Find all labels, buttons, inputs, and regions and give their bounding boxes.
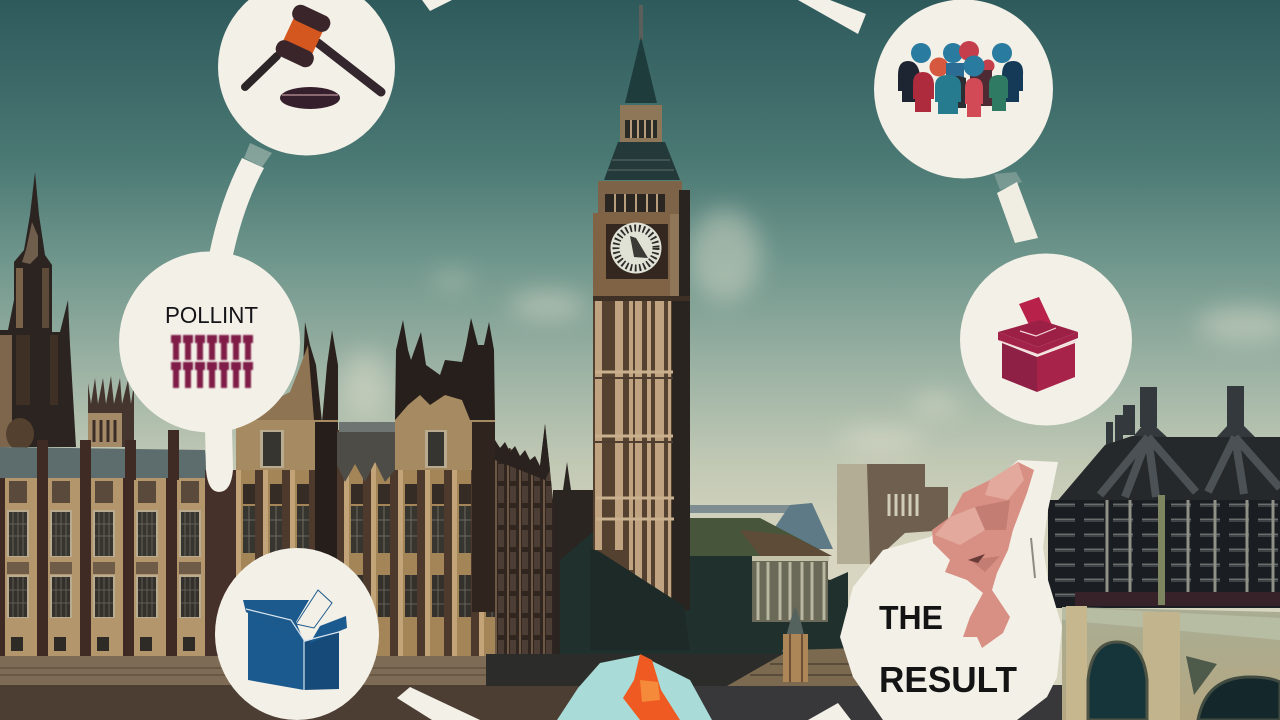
- lower dark block: [553, 462, 595, 656]
- connector: arcs between steps: [209, 0, 1038, 720]
- top-left arc piece: [422, 0, 452, 11]
- roof: [1048, 436, 1280, 512]
- faded link below gavel: [244, 143, 272, 167]
- chimneys: [1106, 386, 1256, 452]
- tan block: [837, 464, 948, 565]
- belfry: [620, 105, 662, 142]
- top-right arc piece: [798, 0, 866, 34]
- heading: the result label: [879, 599, 1017, 700]
- clock stage: [593, 213, 681, 298]
- icon: group of people: [898, 41, 1023, 117]
- faded link below people: [994, 172, 1022, 190]
- Westminster Bridge: [1062, 606, 1280, 720]
- icon: red ballot box: [998, 297, 1078, 392]
- left clock tower spire: [0, 172, 76, 450]
- central link block: [337, 422, 397, 656]
- slate roof: [0, 447, 208, 480]
- spire: [625, 37, 657, 103]
- railing: [1075, 592, 1280, 606]
- step: ballot box red: [960, 254, 1132, 426]
- heading: the result label: THE: [879, 599, 943, 636]
- trees behind colonnade: [560, 530, 848, 656]
- icon: orange figure: [623, 654, 680, 720]
- roof ribs: [1100, 437, 1280, 497]
- step: people: [874, 0, 1053, 178]
- facade: [1048, 500, 1280, 608]
- east wing: [495, 424, 553, 656]
- icon: blue ballot box: [243, 590, 347, 690]
- lantern: [598, 181, 682, 214]
- piers: [1066, 606, 1087, 720]
- clouds: [341, 209, 1280, 454]
- main facade windows: [0, 478, 236, 656]
- small mark: [1031, 538, 1035, 578]
- lamp post: [1158, 495, 1165, 605]
- step: the result: [840, 460, 1062, 720]
- step: bottom turquoise figure: [557, 654, 712, 720]
- arches: [1088, 642, 1147, 720]
- heading: the result label: RESULT: [879, 659, 1017, 700]
- icon: rows of voters: [171, 335, 253, 388]
- Portcullis House: [1048, 386, 1280, 608]
- far buildings: [560, 464, 948, 656]
- bottom-left arc piece: [397, 687, 480, 720]
- shaft: [593, 298, 690, 610]
- left great tower: [236, 322, 338, 660]
- shaft stripes: [595, 300, 671, 605]
- Big Ben tower: [590, 5, 690, 650]
- bottom-right arc piece: [808, 703, 851, 720]
- finial: [639, 5, 643, 40]
- stone columns: [1107, 500, 1273, 605]
- deck: [1062, 607, 1280, 720]
- roof: [604, 142, 680, 180]
- panel: Palace of Westminster: [0, 172, 595, 660]
- small stone tower: [782, 606, 808, 682]
- right dash: [997, 182, 1038, 243]
- heading: polling label: POLLINT: [165, 302, 258, 328]
- icon: gavel: [245, 2, 381, 109]
- step: gavel: [218, 0, 395, 156]
- clock face: [610, 222, 662, 274]
- step: polling: [119, 252, 300, 492]
- small turret: [88, 376, 134, 447]
- icon: pink map shape: [932, 462, 1034, 648]
- left arc piece: [209, 158, 264, 255]
- green roofed building: [688, 503, 833, 622]
- tower shadow: [590, 548, 690, 650]
- right great tower: [395, 318, 495, 660]
- embankment and river: [0, 606, 1280, 720]
- step: ballot box blue: [215, 548, 379, 720]
